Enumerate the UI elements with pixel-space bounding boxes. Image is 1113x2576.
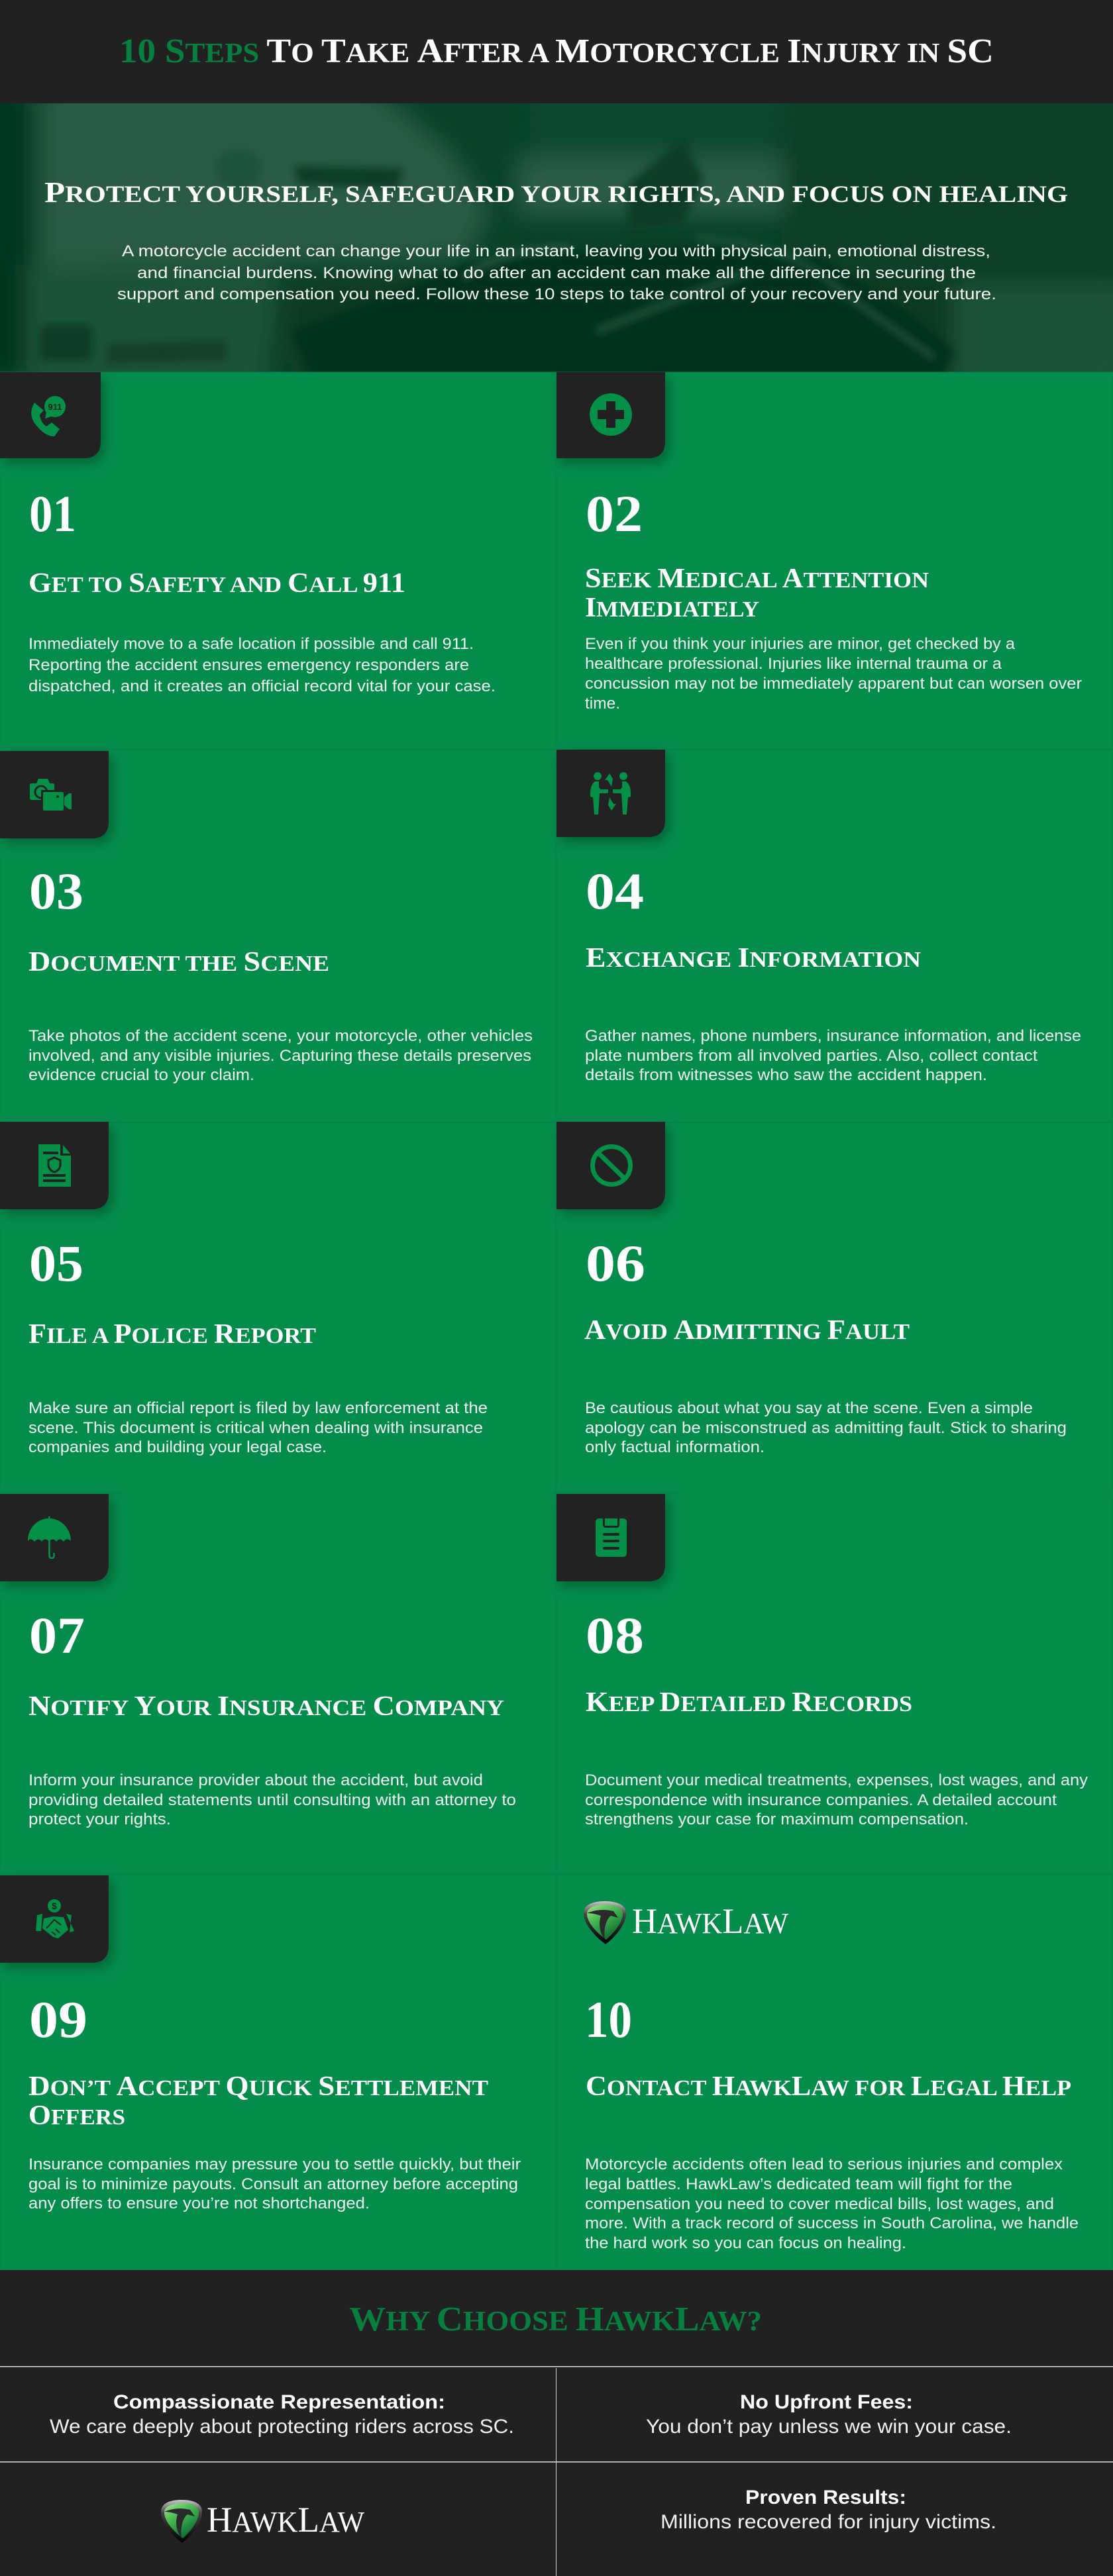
icon tab: phone 911: 911 [48,402,62,412]
icon tab: prohibited sign [556,1122,665,1209]
panel: step 03 [0,750,556,1122]
step text [28,1027,533,1084]
step text: Motorcycle accidents often lead to serious injuries and complex [585,2155,1063,2173]
icon tab: medical cross [556,372,665,458]
icon tab: handshake with dollar: $ [52,1901,57,1911]
panel: step 05 [0,1122,556,1494]
panel: step 02 [556,372,1113,750]
panel: step 06 [556,1122,1113,1494]
step text: any offers to ensure you’re not shortchanged. [28,2195,370,2212]
step text: strengthens your case for maximum compensation. [585,1810,969,1828]
step text: plate numbers from all involved parties. Also, collect contact [585,1047,1037,1065]
step text: apology can be misconstrued as admitting fault. Stick to sharing [585,1419,1067,1437]
step text [585,1771,1088,1828]
step text: only factual information. [585,1438,765,1456]
step text: Take photos of the accident scene, your motorcycle, other vehicles [28,1027,533,1045]
step heading: KEEP DETAILED RECORDS [586,1687,912,1718]
step text: healthcare professional. Injuries like internal trauma or a [585,655,1002,673]
step heading [585,564,929,623]
step text: concussion may not be immediately apparent but can worsen over [585,675,1082,693]
step number: 10 [585,1991,632,2048]
benefit: compassionate representation [50,2391,514,2438]
step heading: OFFERS [28,2101,125,2131]
step text: companies and building your legal case. [28,1438,327,1456]
step text: Be cautious about what you say at the scene. Even a simple [585,1399,1033,1417]
hero paragraph: support and compensation you need. Follow these 10 steps to take control of your recovery and your future. [117,285,996,303]
header band [0,0,1113,103]
benefit: no upfront fees [646,2391,1012,2438]
step text: Even if you think your injuries are minor, get checked by a [585,635,1016,653]
hero paragraph: and financial burdens. Knowing what to do after an accident can make all the difference in securing the [137,264,976,282]
step heading [28,2071,488,2131]
step text: time. [585,695,620,713]
step text: legal battles. HawkLaw’s dedicated team will fight for the [585,2175,1012,2193]
logo: HawkLaw on dark: HAWKLAW [207,2500,364,2540]
step number: 01 [29,485,76,542]
step text: compensation you need to cover medical bills, lost wages, and [585,2195,1054,2213]
step text: Gather names, phone numbers, insurance information, and license [585,1027,1081,1045]
step number: 04 [586,862,644,920]
icon tab: clipboard [556,1494,665,1581]
step text: Immediately move to a safe location if possible and call 911. [28,635,474,653]
step text: details from witnesses who saw the accident happen. [585,1066,987,1084]
benefit: no upfront fees: You don’t pay unless we win your case. [646,2416,1012,2438]
step text: Insurance companies may pressure you to settle quickly, but their [28,2155,521,2173]
step heading: CONTACT HAWKLAW FOR LEGAL HELP [586,2071,1071,2102]
step text: Reporting the accident ensures emergency responders are [28,656,469,674]
step text: Inform your insurance provider about the accident, but avoid [28,1771,483,1789]
benefit: no upfront fees: No Upfront Fees: [740,2391,913,2413]
step text [28,635,496,695]
step text [28,2155,521,2212]
hero paragraph [117,242,996,303]
step heading: NOTIFY YOUR INSURANCE COMPANY [28,1691,504,1722]
step text [585,1399,1067,1456]
step text: the hard work so you can focus on healing. [585,2234,906,2252]
icon tab: phone 911 [0,372,101,458]
step text: Document your medical treatments, expenses, lost wages, and any [585,1771,1088,1789]
step text [585,2155,1079,2252]
step heading: GET TO SAFETY AND CALL 911 [28,568,405,599]
step text: scene. This document is critical when dealing with insurance [28,1419,483,1437]
step number: 05 [29,1234,83,1292]
section heading: WHY CHOOSE HAWKLAW? [349,2301,762,2338]
icon tab: police report document [0,1122,109,1209]
step number: 07 [29,1607,85,1664]
panel: why choose HawkLaw [0,2270,1113,2576]
step heading: IMMEDIATELY [585,593,759,623]
title: 10 STEPS TO TAKE AFTER A MOTORCYCLE INJURY IN SC [119,32,994,70]
step text: Make sure an official report is filed by law enforcement at the [28,1399,488,1417]
panel: step 01 [0,372,556,750]
step text: providing detailed statements until consulting with an attorney to [28,1791,516,1809]
step number: 03 [29,862,83,920]
panel: step 09 [0,1874,556,2270]
panel: step 07 [0,1494,556,1874]
icon tab: camera and video [0,751,109,838]
panel: step 04 [556,750,1113,1122]
icon tab: umbrella [0,1494,109,1581]
step text: correspondence with insurance companies. A detailed account [585,1791,1057,1809]
step heading: DOCUMENT THE SCENE [28,947,329,977]
step text: goal is to minimize payouts. Consult an attorney before accepting [28,2175,518,2193]
step heading: FILE A POLICE REPORT [28,1319,316,1350]
step text: involved, and any visible injuries. Capturing these details preserves [28,1047,531,1065]
step heading: DON’T ACCEPT QUICK SETTLEMENT [28,2071,488,2102]
hero paragraph: A motorcycle accident can change your life in an instant, leaving you with physical pain, emotional distress, [122,242,990,260]
step number: 06 [586,1234,645,1292]
benefit: proven results: Proven Results: [745,2487,906,2508]
step text: evidence crucial to your claim. [28,1066,254,1084]
step number: 08 [586,1607,644,1664]
step number: 09 [29,1991,87,2048]
step number: 02 [586,485,643,542]
step text [585,635,1082,713]
step text [28,1399,488,1456]
step text: dispatched, and it creates an official record vital for your case. [28,677,496,695]
icon tab: handshake with dollar [0,1875,109,1963]
hero background photo [0,103,1113,372]
panel: step 10 [556,1874,1113,2270]
step text: protect your rights. [28,1810,171,1828]
hero heading: PROTECT YOURSELF, SAFEGUARD YOUR RIGHTS, AND FOCUS ON HEALING [44,175,1068,209]
logo: HawkLaw on green: HAWKLAW [632,1901,788,1941]
benefit: compassionate representation: Compassionate Representation: [113,2391,445,2413]
step heading: SEEK MEDICAL ATTENTION [585,564,929,594]
benefit: compassionate representation: We care deeply about protecting riders across SC. [50,2416,514,2438]
step text [28,1771,516,1828]
step heading: AVOID ADMITTING FAULT [584,1315,910,1346]
benefit: proven results: Millions recovered for injury victims. [661,2511,996,2533]
step heading: EXCHANGE INFORMATION [586,943,921,973]
step text: more. With a track record of success in South Carolina, we handle [585,2214,1079,2232]
hero panel [0,103,1113,372]
step text [585,1027,1081,1084]
panel: step 08 [556,1494,1113,1874]
icon tab: exchange people [556,750,665,837]
benefit: proven results [661,2487,996,2533]
